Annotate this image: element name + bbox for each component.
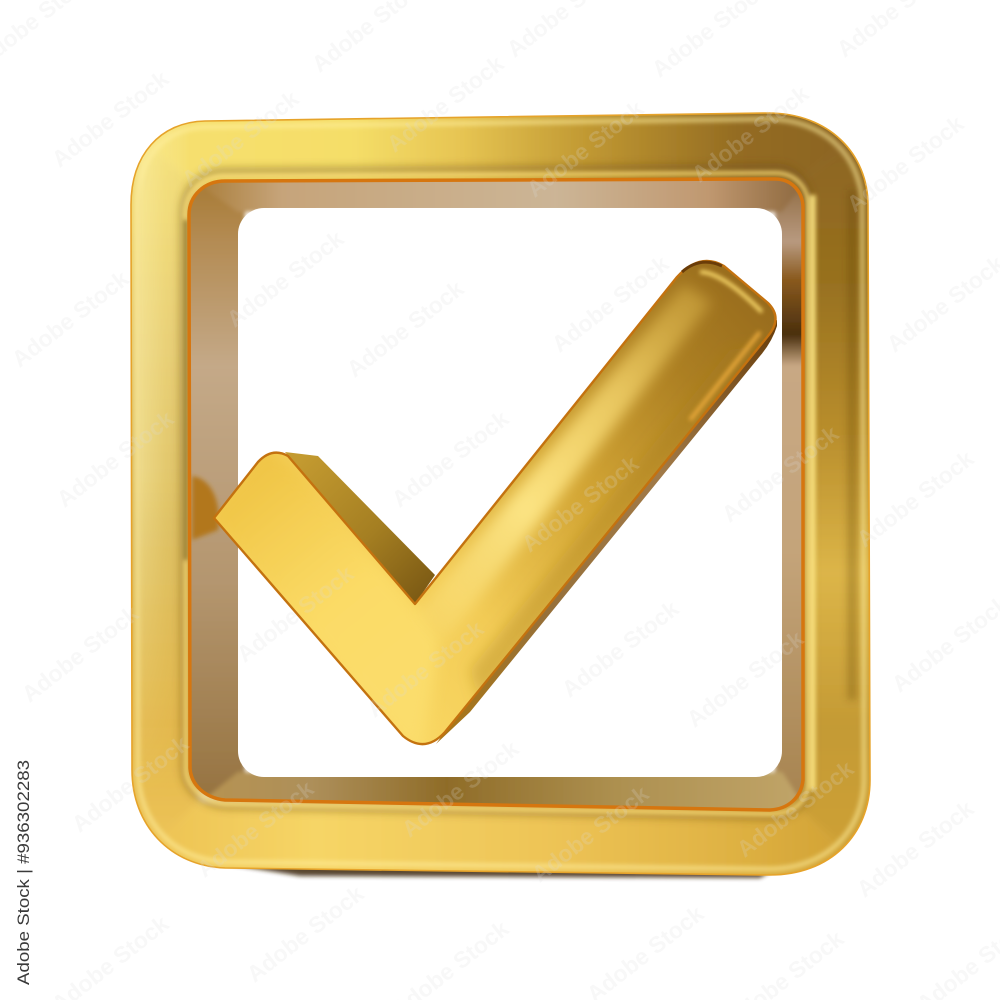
faint repeating watermark: Adobe Stock xyxy=(362,615,489,722)
faint repeating watermark: Adobe Stock xyxy=(527,780,654,887)
outer rim line xyxy=(131,113,870,875)
frame bottom contact shadow xyxy=(225,864,770,878)
bevel right xyxy=(775,175,807,815)
end cap highlight xyxy=(700,272,762,312)
inner bevel of frame xyxy=(185,175,810,815)
faint repeating watermark: Adobe Stock xyxy=(47,65,174,172)
faint repeating watermark: Adobe Stock xyxy=(717,420,844,527)
end lower edge highlight xyxy=(690,332,760,420)
outer rim shine xyxy=(137,119,864,869)
faint repeating watermark: Adobe Stock xyxy=(732,755,859,862)
check face outline xyxy=(214,261,776,744)
faint repeating watermark: Adobe Stock xyxy=(852,445,979,552)
dark band on right bar edge xyxy=(848,190,856,700)
gold frame body xyxy=(130,112,871,876)
faint repeating watermark: Adobe Stock xyxy=(387,405,514,512)
light band around inner rim xyxy=(185,173,808,814)
faint repeating watermark: Adobe Stock xyxy=(397,735,524,842)
bevel top xyxy=(208,180,795,215)
short arm back side xyxy=(285,452,435,604)
faint repeating watermark: Adobe Stock xyxy=(177,85,304,192)
faint repeating watermark: Adobe Stock xyxy=(17,600,144,707)
faint repeating watermark: Adobe Stock xyxy=(547,250,674,357)
long arm lower darker band xyxy=(468,456,656,692)
gold checkbox illustration xyxy=(17,112,871,985)
left bar highlight xyxy=(132,126,182,742)
dark tip of check end xyxy=(682,262,722,272)
check shadow on left bevel xyxy=(192,476,219,540)
check mark xyxy=(213,260,777,746)
faint repeating watermark: Adobe Stock xyxy=(517,450,644,557)
check front face xyxy=(216,264,774,743)
faint repeating watermark: Adobe Stock xyxy=(382,50,509,157)
frame bottom bar xyxy=(156,796,846,874)
faint repeating watermark: Adobe Stock xyxy=(557,595,684,702)
long arm side xyxy=(436,320,777,744)
bright stripe on right bar inner edge xyxy=(809,195,816,790)
long arm upper shine xyxy=(418,284,712,640)
short arm surface xyxy=(216,454,438,741)
faint repeating watermark: Adobe Stock xyxy=(192,775,319,882)
dark stripe on left bar inner edge xyxy=(184,220,187,560)
orange inner rim xyxy=(189,179,803,810)
faint repeating watermark: Adobe Stock xyxy=(687,80,814,187)
faint repeating watermark: Adobe Stock xyxy=(852,795,979,902)
soft inner tube shadow xyxy=(184,168,808,816)
bevel bottom xyxy=(210,770,797,808)
frame right bar xyxy=(790,100,900,900)
faint repeating watermark: Adobe Stock xyxy=(842,110,969,217)
frame top bar xyxy=(148,114,848,192)
faint repeating watermark: Adobe Stock xyxy=(342,275,469,382)
bevel left xyxy=(185,175,245,815)
faint repeating watermark: Adobe Stock xyxy=(682,625,809,732)
faint repeating watermark: Adobe Stock xyxy=(67,730,194,837)
frame left bar xyxy=(132,142,204,844)
faint repeating watermark: Adobe Stock xyxy=(52,405,179,512)
window opening xyxy=(238,208,782,777)
faint repeating watermark: Adobe Stock xyxy=(242,880,369,987)
faint repeating watermark: Adobe Stock xyxy=(7,265,134,372)
faint repeating watermark: Adobe Stock xyxy=(522,95,649,202)
faint repeating watermark: Adobe Stock xyxy=(232,560,359,667)
stock id: Adobe Stock | #936302283 xyxy=(14,760,33,985)
faint repeating watermark: Adobe Stock xyxy=(222,225,349,332)
